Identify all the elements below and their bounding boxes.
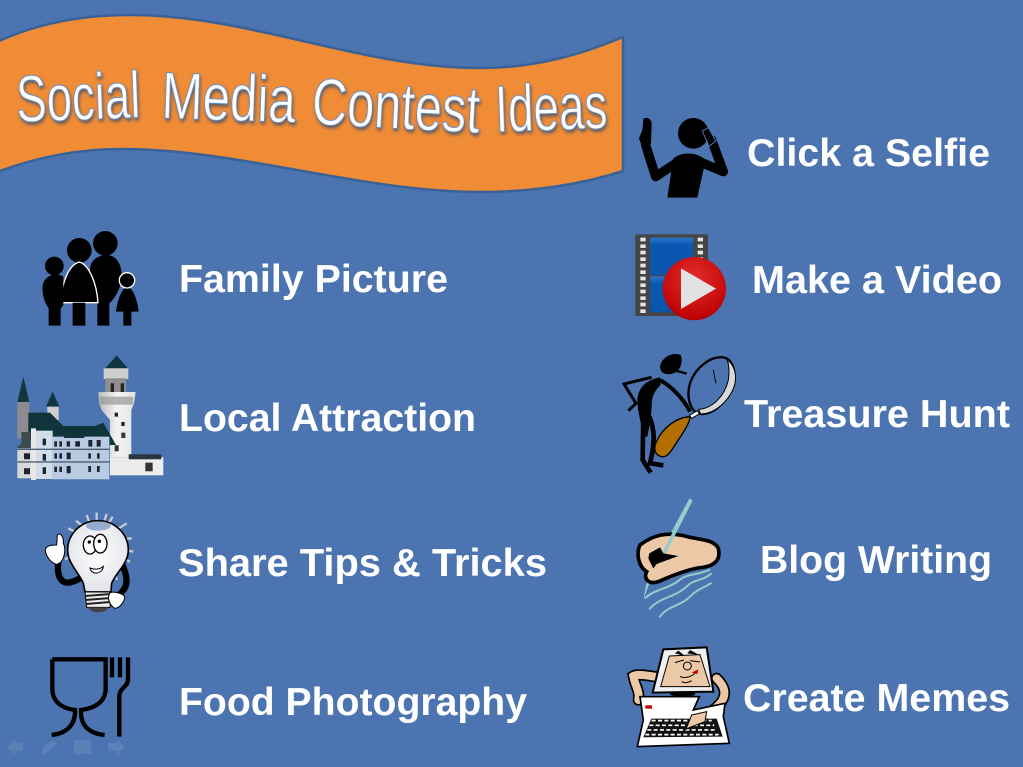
icon: menu [74, 740, 91, 754]
label: Local Attraction: Local Attraction [179, 397, 476, 440]
bulb glass [68, 521, 128, 592]
icon: selfie person [639, 118, 723, 198]
bulb rays [65, 513, 133, 580]
castle tower [98, 355, 136, 457]
computer right arm [693, 678, 724, 723]
title text: Contest [310, 64, 482, 147]
film strip [635, 234, 708, 316]
hand [638, 534, 719, 583]
computer hand [686, 712, 707, 729]
bulb face [83, 536, 97, 554]
label: Family Picture: Family Picture [179, 258, 448, 301]
title text [15, 58, 608, 147]
computer monitor [653, 647, 713, 693]
title banner [0, 15, 623, 192]
icon: food safe glass and fork [52, 657, 128, 737]
label: Make a Video: Make a Video [752, 259, 1002, 302]
computer face [661, 655, 710, 687]
castle annex [110, 457, 163, 475]
pen [643, 499, 693, 600]
title text: Media [161, 58, 297, 137]
bulb arms [58, 562, 85, 583]
icon: family [42, 231, 139, 326]
icon: back arrow [7, 739, 23, 755]
castle main hall [28, 413, 116, 445]
icon: video film strip with play button [635, 234, 726, 320]
icon: castle [17, 355, 163, 480]
bulb screw base [85, 592, 111, 607]
bulb hands [45, 534, 65, 564]
label: Blog Writing: Blog Writing [760, 539, 992, 582]
icon: hand writing [638, 499, 719, 617]
label: Share Tips & Tricks: Share Tips & Tricks [178, 542, 547, 585]
icon: light bulb [45, 513, 133, 612]
label: Food Photography: Food Photography [179, 681, 527, 724]
magnifier lens [688, 357, 734, 414]
icon: magnifying glass figure [624, 354, 736, 473]
magnifier handle [689, 411, 699, 418]
written lines [645, 569, 712, 617]
play button [663, 257, 726, 320]
label: Click a Selfie: Click a Selfie [747, 132, 990, 175]
computer left arm [633, 675, 655, 700]
icon: computer character [633, 647, 729, 747]
label: Create Memes: Create Memes [743, 677, 1010, 720]
label: Treasure Hunt: Treasure Hunt [744, 393, 1010, 436]
icon: forward arrow [108, 739, 125, 755]
navigation controls [7, 739, 125, 755]
icon: pen [41, 740, 57, 755]
title text: Social [15, 58, 141, 136]
figure [624, 354, 690, 473]
title text: Ideas [494, 68, 608, 146]
computer keyboard body [637, 697, 729, 747]
castle spire [17, 377, 29, 402]
